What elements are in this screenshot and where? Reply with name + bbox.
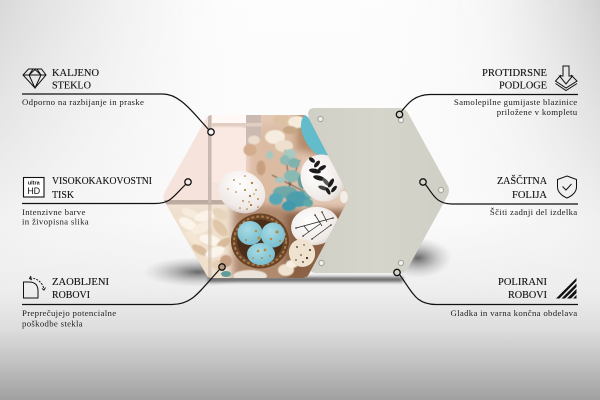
icon: ultra HD: [24, 178, 44, 197]
callout: visokokakovostni tisk: VISOKOKAKOVOSTNI: [52, 176, 152, 187]
shadows under hexagons: [143, 238, 452, 287]
callout: zaobljeni robovi: ZAOBLJENI: [52, 277, 110, 288]
mounting pins: [318, 116, 444, 266]
dried flowers bottom left: [177, 206, 233, 271]
callout: visokokakovostni tisk: in živopisna slika: [22, 216, 89, 226]
callout: protidrsne podloge: [396, 66, 578, 118]
front of hexagon: Easter eggs photo: [164, 115, 348, 278]
callout: kaljeno steklo: Odporno na razbijanje in praske: [22, 97, 144, 107]
dried flowers top right: [265, 115, 306, 152]
callout: kaljeno steklo: [22, 68, 214, 135]
icon: rounded corner: [24, 276, 46, 298]
nest with blue eggs: [231, 214, 289, 268]
small almonds: [244, 136, 266, 176]
callout: kaljeno steklo: KALJENO: [52, 68, 99, 79]
egg: small speckled: [288, 239, 316, 267]
right edge small egg: [340, 191, 348, 203]
callout: zaščitna folija: FOLIJA: [512, 190, 547, 201]
callout: visokokakovostni tisk: TISK: [52, 190, 74, 201]
icon: anti-slip pad with arrow: [556, 66, 577, 90]
callout: visokokakovostni tisk: [22, 176, 191, 226]
icon: diamond: [23, 69, 46, 88]
icon: ultra HD: ultra: [28, 180, 41, 186]
icon: ultra HD: HD: [27, 186, 41, 196]
callout: zaobljeni robovi: [22, 264, 225, 328]
callout: zaobljeni robovi: ROBOVI: [52, 290, 91, 301]
callout: protidrsne podloge: PROTIDRSNE: [482, 68, 547, 79]
callout: zaščitna folija: ZAŠČITNA: [497, 175, 547, 187]
callout: polirani robovi: POLIRANI: [498, 277, 548, 288]
callout: polirani robovi: [394, 269, 578, 318]
callout: zaobljeni robovi: poškodbe stekla: [22, 318, 83, 328]
callout: zaobljeni robovi: Preprečujejo potencialne: [22, 308, 116, 318]
callout: zaščitna folija: Ščiti zadnji del izdelka: [490, 207, 578, 217]
icon: polished edge stripes: [556, 278, 576, 298]
soft backdrop tones: [164, 115, 346, 278]
callout: kaljeno steklo: STEKLO: [52, 80, 91, 92]
egg: white with leaf sprig: [300, 154, 344, 202]
callout: polirani robovi: Gladka in varna končna obdelava: [450, 308, 578, 318]
teal bit at bottom: [221, 271, 231, 277]
callout: protidrsne podloge: PODLOGE: [499, 80, 547, 92]
callout: protidrsne podloge: Samolepilne gumijaste blazinice: [454, 97, 578, 107]
callout: visokokakovostni tisk: Intenzivne barve: [22, 207, 86, 217]
egg: white with branch drawing: [291, 206, 338, 246]
blue egg behind: [300, 115, 328, 156]
dried flowers bottom right: [232, 260, 298, 278]
egg: white with gold speckles: [219, 170, 266, 214]
callout: zaščitna folija: [420, 175, 578, 217]
teal foliage: [266, 149, 320, 211]
back of hexagon: grey panel: [308, 108, 449, 273]
callout: protidrsne podloge: priložene v kompletu: [497, 107, 578, 117]
callout: polirani robovi: ROBOVI: [508, 290, 548, 301]
window bands: [164, 200, 225, 204]
window light: [212, 115, 246, 123]
icon: shield: [558, 176, 576, 198]
